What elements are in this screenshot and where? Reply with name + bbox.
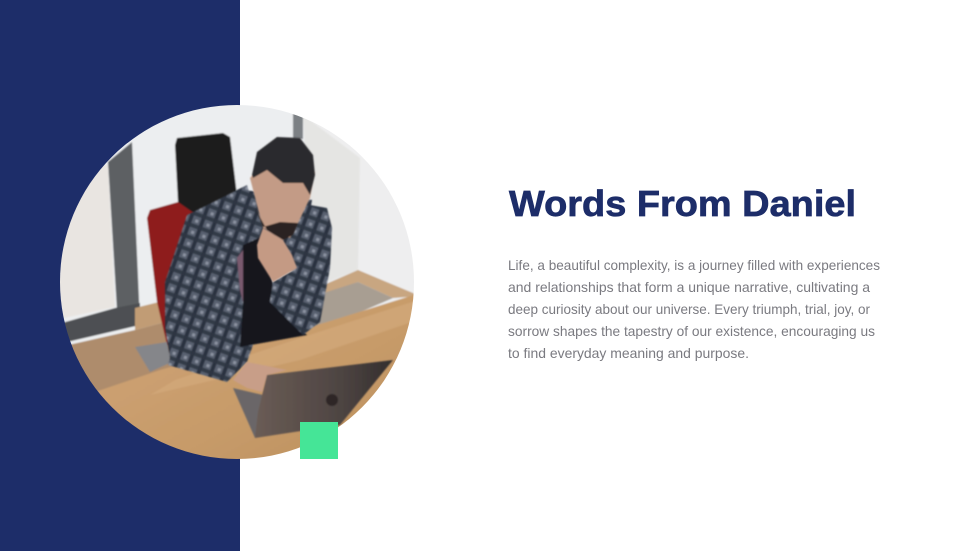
body paragraph: sorrow shapes the tapestry of our existence, encouraging us bbox=[508, 323, 875, 339]
window frame bbox=[55, 112, 303, 345]
body paragraph: deep curiosity about our universe. Every triumph, trial, joy, or bbox=[508, 301, 870, 317]
photo background wall bbox=[64, 105, 404, 346]
man: shirt bbox=[165, 185, 332, 382]
man: head and hand bbox=[233, 137, 315, 392]
circular photo: man working at laptop bbox=[55, 100, 420, 470]
window light pane bbox=[55, 165, 115, 320]
laptop bbox=[233, 360, 393, 438]
baseboard and carpet floor bbox=[314, 270, 414, 326]
body paragraph: to find everyday meaning and purpose. bbox=[508, 345, 749, 361]
wooden floor bbox=[71, 322, 174, 392]
body paragraph bbox=[508, 257, 880, 361]
right wall bbox=[303, 118, 360, 281]
green accent square bbox=[300, 422, 338, 459]
wooden desk bbox=[95, 293, 420, 470]
office chair bbox=[135, 133, 237, 372]
navy side panel bbox=[0, 0, 240, 551]
body paragraph: Life, a beautiful complexity, is a journey filled with experiences bbox=[508, 257, 880, 273]
body paragraph: and relationships that form a unique narrative, cultivating a bbox=[508, 279, 870, 295]
title: Words From Daniel bbox=[509, 183, 856, 224]
